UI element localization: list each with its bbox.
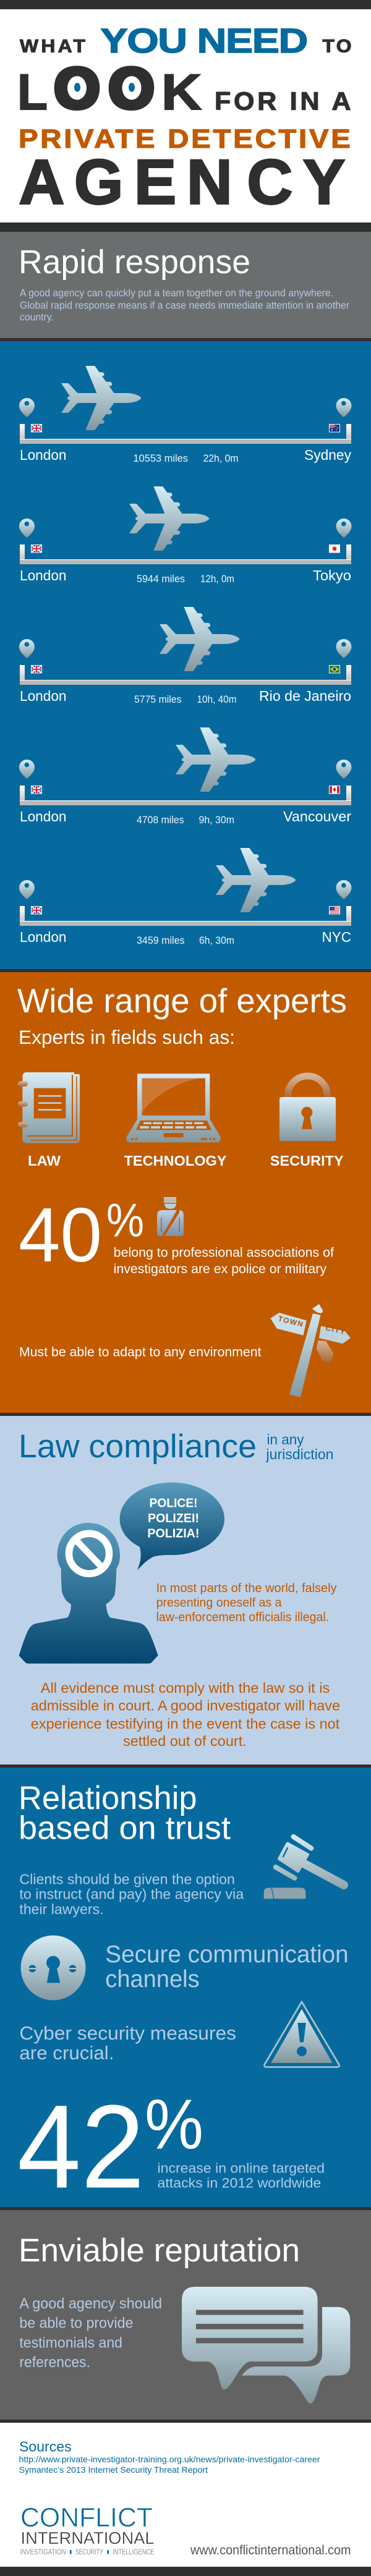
source list: http://www.private-investigator-training.org.uk/news/private-investigator-career (19, 2455, 320, 2464)
route: London to Sydney (19, 366, 351, 464)
text: clients (19, 1871, 244, 1917)
route: London to Tokyo (19, 486, 351, 585)
icon: padlock (279, 1076, 336, 1141)
icon: right pin (336, 519, 351, 538)
destination label: Vancouver (283, 808, 351, 824)
icon: left pin (19, 880, 35, 899)
logo: Conflict International: INTELLIGENCE (113, 2549, 155, 2556)
icon: gavel (264, 1837, 344, 1899)
text: cyber security: are crucial. (19, 2042, 114, 2064)
logo: Conflict International (20, 2502, 155, 2556)
icon: plane (216, 848, 296, 912)
stat: 42 percent: % (145, 2085, 203, 2164)
label: security: SECURITY (270, 1153, 344, 1169)
title line 1: WHAT (20, 35, 85, 56)
subheading: Experts in fields such as: (19, 1026, 235, 1048)
text: evidence: experience testifying in the event the case is not (31, 1716, 340, 1732)
icon: plane (160, 607, 239, 671)
time: 22h, 0m (203, 452, 239, 464)
source list (19, 2455, 320, 2475)
title line 2: look: FOR IN A (215, 87, 351, 115)
speech bubble: POLIZIA! (147, 1527, 199, 1541)
icon: chat bubbles (182, 2287, 350, 2404)
stat description (157, 2161, 325, 2190)
text: evidence: All evidence must comply with the law so it is (41, 1680, 330, 1696)
origin label: London (20, 567, 67, 583)
text: secure communication (105, 1941, 349, 1993)
logo: Conflict International: INVESTIGATION (20, 2549, 66, 2556)
title line 4: AGENCY (19, 147, 345, 218)
heading aside (265, 1431, 334, 1462)
text: evidence (31, 1680, 340, 1749)
text: testimonials: testimonials and (19, 2335, 122, 2351)
flag: USA (329, 906, 340, 915)
text: falsely presenting: presenting oneself as a (156, 1596, 282, 1609)
text: testimonials (19, 2295, 162, 2371)
icon: right pin (336, 760, 351, 779)
text: evidence: settled out of court. (123, 1733, 247, 1749)
speech bubble: POLIZEI! (148, 1511, 199, 1525)
icon: laptop (126, 1074, 221, 1142)
distance: 5944 miles (137, 573, 185, 585)
stat: 40 percent (19, 1193, 144, 1278)
icon: keyhole plate (21, 1936, 85, 2000)
text: testimonials: A good agency should (19, 2295, 162, 2312)
sources heading: Sources (19, 2438, 72, 2454)
text: secure communication: Secure communication (105, 1941, 349, 1968)
stat: 40 percent: 40 (19, 1193, 102, 1278)
text: secure communication: channels (105, 1966, 200, 1993)
flag: UK (31, 665, 42, 674)
time: 9h, 30m (199, 814, 234, 826)
flag: Brazil (329, 665, 340, 674)
icon: warning triangle (264, 2002, 339, 2067)
label: technology: TECHNOLOGY (124, 1153, 227, 1169)
icon: plane (61, 366, 141, 430)
text: falsely presenting (156, 1582, 337, 1624)
heading: based on trust (19, 1810, 231, 1846)
flag: UK (31, 424, 42, 433)
route bracket (20, 786, 351, 805)
icon: left pin (19, 760, 35, 779)
icon: signpost: TOWN (277, 1314, 305, 1329)
icon: right pin (336, 880, 351, 899)
icon: signpost: CITY (325, 1323, 347, 1336)
source list: Symantec’s 2013 Internet Security Threat Report (19, 2465, 208, 2475)
heading: Wide range of experts (17, 982, 347, 1020)
destination label: Rio de Janeiro (259, 688, 351, 704)
text: clients: their lawyers. (19, 1901, 104, 1917)
stat: 42 percent: 42 (17, 2080, 145, 2213)
flag: Japan (329, 544, 340, 553)
route bracket (20, 424, 351, 444)
label: law: LAW (28, 1153, 61, 1169)
flag: UK (31, 786, 42, 794)
icon: plane (176, 727, 255, 792)
heading: Law compliance (19, 1428, 257, 1465)
text: falsely presenting: In most parts of the world, falsely (156, 1582, 337, 1595)
icon: signpost (270, 1304, 351, 1397)
heading: Enviable reputation (19, 2232, 300, 2269)
heading aside: in any (267, 1431, 304, 1447)
route bracket (20, 665, 351, 685)
title line 2: look: O (107, 54, 156, 122)
panel: routes (0, 341, 371, 969)
logo: Conflict International: CONFLICT (20, 2502, 153, 2533)
stat description: belong to professional associations of (114, 1246, 334, 1260)
origin label: London (20, 808, 67, 824)
time: 6h, 30m (199, 934, 234, 946)
text: testimonials: be able to provide (19, 2315, 133, 2332)
text: testimonials: references. (19, 2354, 90, 2371)
destination label: Tokyo (313, 567, 351, 583)
stat description: investigators are ex police or military (114, 1262, 326, 1276)
speech bubble (120, 1483, 224, 1570)
flag: Canada (329, 786, 340, 794)
time: 10h, 40m (197, 693, 236, 705)
heading aside: jurisdiction (265, 1446, 334, 1462)
destination label: NYC (322, 929, 351, 945)
title line 2: look (17, 54, 351, 122)
flag: Australia (329, 424, 340, 433)
title line 2: look: O (53, 54, 101, 122)
origin label: London (20, 447, 67, 463)
distance: 5775 miles (134, 693, 182, 705)
title line 1 (20, 22, 351, 60)
distance: 3459 miles (137, 934, 184, 946)
body text: Global rapid response means if a case needs immediate attention in another (20, 300, 349, 311)
title line 1: YOU NEED (100, 22, 308, 60)
flag: UK (31, 906, 42, 915)
body text (20, 288, 349, 323)
heading (19, 1780, 231, 1846)
website url: www.conflictinternational.com (190, 2543, 351, 2557)
panel: wide range of experts (0, 972, 371, 1413)
stat description: attacks in 2012 worldwide (157, 2175, 321, 2190)
icon: right pin (336, 639, 351, 658)
route: London to NYC (19, 848, 351, 946)
panel: relationship based on trust (0, 1768, 371, 2213)
title line 1: TO (323, 35, 351, 56)
route: London to Rio de Janeiro (19, 607, 351, 705)
title line 2: look: L (17, 64, 48, 121)
text: cyber security (19, 2022, 236, 2064)
route bracket (20, 906, 351, 926)
icon: left pin (19, 398, 35, 417)
text: clients: to instruct (and pay) the agency via (19, 1886, 244, 1902)
speech bubble: POLICE! (150, 1496, 198, 1510)
panel: sources and logo (0, 2423, 371, 2567)
text: falsely presenting: law-enforcement officialis illegal. (156, 1611, 329, 1624)
text: evidence: admissible in court. A good investigator will have (31, 1697, 340, 1713)
text: clients: Clients should be given the option (19, 1871, 235, 1888)
distance: 4708 miles (137, 814, 184, 826)
title line 2: look: K (161, 64, 202, 121)
logo: Conflict International: SECURITY (75, 2549, 103, 2556)
heading: Relationship (19, 1780, 197, 1816)
icon: plane (129, 486, 209, 551)
icon: person with no sign (19, 1523, 158, 1664)
icon: officer (157, 1197, 184, 1236)
logo: Conflict International: INTERNATIONAL (21, 2528, 155, 2548)
stat description (114, 1246, 334, 1276)
panel: title (0, 9, 371, 222)
body text: country. (20, 311, 54, 323)
heading: Rapid response (19, 244, 250, 281)
flag: UK (31, 544, 42, 553)
adapt text: Must be able to adapt to any environment (19, 1345, 262, 1360)
route bracket (20, 544, 351, 564)
top dark bar (0, 0, 371, 9)
stat: 40 percent: % (106, 1194, 144, 1247)
panel: law compliance (0, 1416, 371, 1765)
icon: right pin (336, 398, 351, 417)
text: cyber security: Cyber security measures (19, 2022, 236, 2044)
stat description: increase in online targeted (157, 2161, 325, 2176)
icon: left pin (19, 519, 35, 538)
icon: law notebook (18, 1072, 80, 1143)
distance: 10553 miles (134, 452, 188, 464)
panel: enviable reputation (0, 2210, 371, 2420)
panel: rapid response intro (0, 232, 371, 338)
destination label: Sydney (304, 447, 351, 463)
origin label: London (20, 929, 67, 945)
body text: A good agency can quickly put a team together on the ground anywhere. (20, 288, 333, 299)
route: London to Vancouver (19, 727, 351, 826)
origin label: London (20, 688, 67, 704)
title line 3: PRIVATE DETECTIVE (19, 124, 351, 154)
time: 12h, 0m (200, 573, 234, 585)
icon: left pin (19, 639, 35, 658)
